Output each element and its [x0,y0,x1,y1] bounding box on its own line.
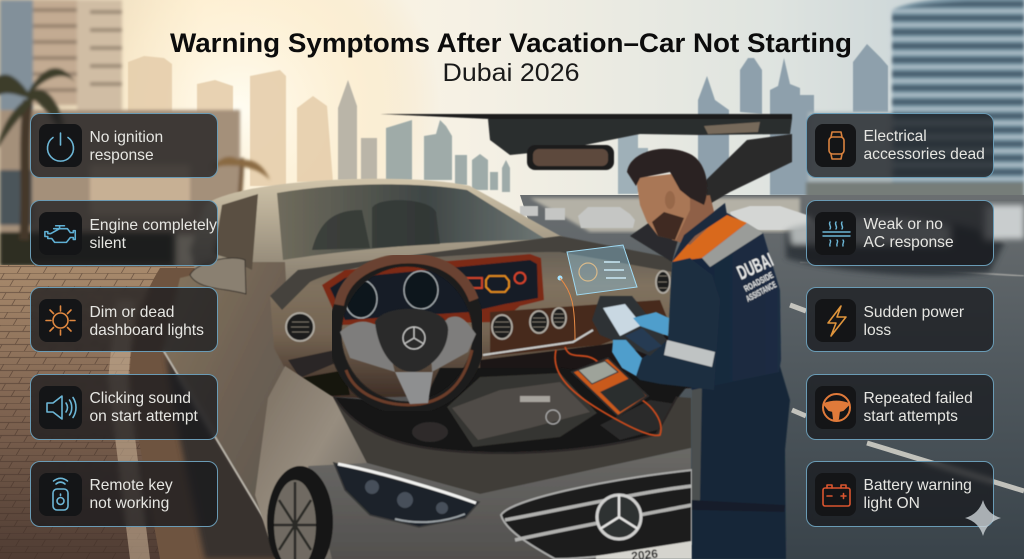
side mirror [190,258,246,294]
card: battery warning light on [806,460,994,526]
orange tester with cables [555,347,661,435]
sky and sun glow [0,0,1024,300]
card: dim or dead dashboard lights: dashboard lights [90,322,204,339]
card: remote key not working [30,460,218,526]
head and neck [627,149,716,245]
cowl [630,222,678,262]
interior seen through windshield [312,200,440,250]
card: engine completely silent: silent [90,234,126,252]
left street buildings and palm [0,0,270,266]
slam panel [333,397,691,494]
card: clicking sound on start attempt: on start attempt [90,408,198,424]
side door [163,262,290,532]
card: dim or dead dashboard lights [30,287,218,352]
rear-view mirror [527,145,614,170]
mechanic [592,149,790,559]
steering wheel [335,258,479,408]
card: weak or no ac response [806,200,994,266]
card: no ignition response: response [90,146,154,164]
card: dim or dead dashboard lights: Dim or dead [90,304,174,321]
uniform torso [672,213,781,390]
wood trim [490,300,668,356]
orange shoulder [672,215,747,262]
hologram display [558,245,637,340]
back lettering: ASSISTANCE [744,279,778,304]
side window [214,194,258,270]
steering wheel star [403,327,425,349]
warning lights [467,272,526,292]
pavement [0,265,300,559]
card: no ignition response: No ignition [90,128,163,146]
road with lane markings [520,195,1024,559]
title: Warning Symptoms After Vacation–Car Not Starting [170,28,852,58]
door pillar [703,134,792,205]
reflective stripe [702,223,763,267]
car body [163,179,575,532]
skyline [128,44,888,195]
grille [501,470,692,559]
arm [628,258,720,390]
engine bay [333,368,692,454]
card: battery warning light on: Battery warning [864,476,972,494]
front end with bumper [255,366,692,559]
roof and pillars [190,179,575,300]
card: battery warning light on: light ON [864,494,920,512]
panel: left symptoms [30,113,218,527]
card: weak or no ac response: AC response [864,234,954,250]
air vents [286,271,670,341]
chrome trim [480,330,692,398]
card: engine completely silent [30,200,218,266]
back lettering: DUBAI [734,249,777,285]
back lettering: ROADSIDE [742,270,775,294]
tablet scanner [592,296,667,356]
headlight [334,463,479,527]
instrument display [322,254,544,325]
dashboard [270,236,692,398]
card: remote key not working: Remote key [90,476,173,494]
card: electrical accessories dead: accessories dead [864,146,985,162]
sparkle logo [965,500,1001,536]
open hood underside and roof frame [380,114,792,262]
blue gloves [612,312,669,376]
card: clicking sound on start attempt: Clicking sound [90,390,191,406]
fender [255,366,367,559]
windshield [277,184,547,260]
right tower and buildings [806,0,1024,212]
collar [672,203,727,262]
number plate [596,541,692,559]
card: sudden power loss: Sudden power [864,304,964,321]
card: sudden power loss: loss [864,322,891,339]
front wheel [267,466,333,559]
card: electrical accessories dead [806,112,994,178]
title: Dubai 2026 [442,59,580,87]
panel: right symptoms [806,113,994,527]
card: repeated failed start attempts: Repeated failed [864,390,973,406]
card: no ignition response [30,112,218,178]
card: engine completely silent: Engine completely [90,216,217,234]
card: clicking sound on start attempt [30,374,218,440]
card: repeated failed start attempts: start attempts [864,408,958,424]
gauges [345,271,438,318]
card: weak or no ac response: Weak or no [864,216,943,232]
card: electrical accessories dead: Electrical [864,128,927,144]
uniform legs [692,363,790,559]
engine cover [447,373,597,447]
card: remote key not working: not working [90,494,169,512]
title [170,28,852,87]
uae flag patch [676,294,690,306]
card: sudden power loss [806,287,994,352]
back lettering [734,249,778,304]
card: repeated failed start attempts [806,374,994,440]
bumper [308,448,691,559]
